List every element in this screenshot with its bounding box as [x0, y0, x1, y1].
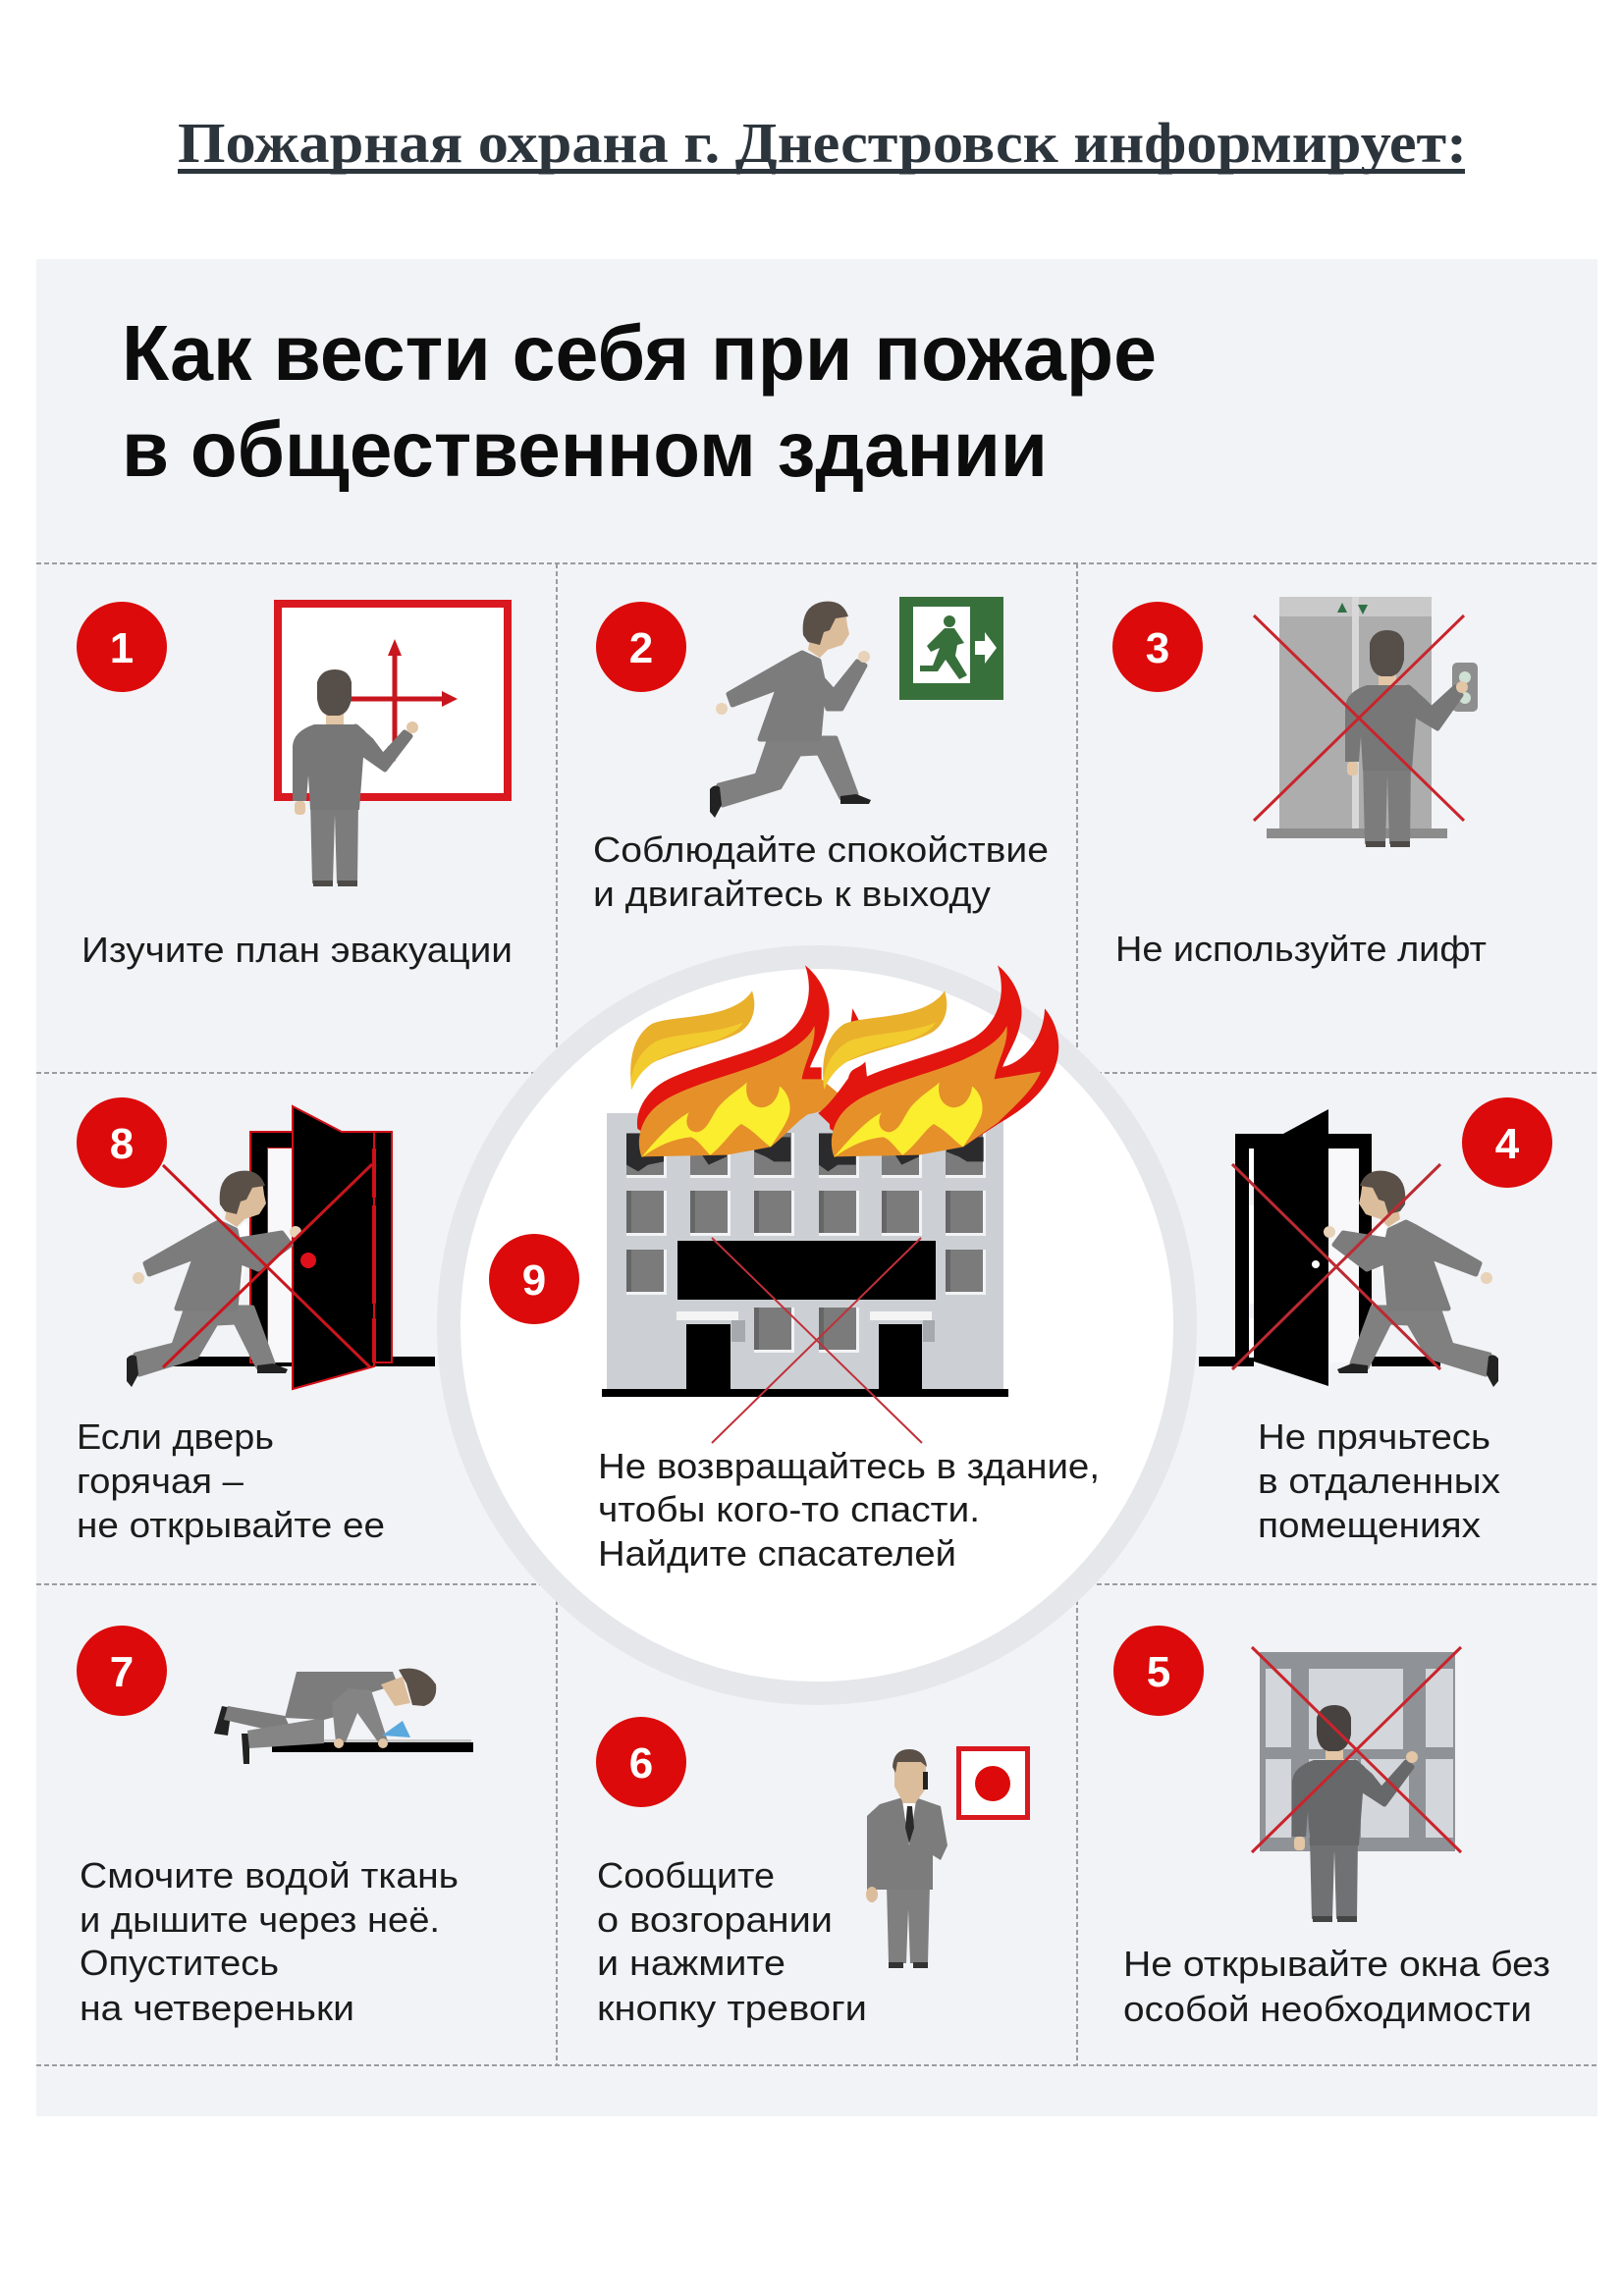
badge 3 — [1112, 602, 1203, 692]
caption 9 — [598, 1446, 1100, 1574]
central circle: step 9, do not return to the building — [449, 957, 1185, 1693]
caption 4: в отдаленных — [1258, 1461, 1500, 1501]
caption 6: о возгорании — [597, 1899, 833, 1940]
badge 5 — [1113, 1626, 1204, 1716]
icon: evacuation plan frame with arrows — [278, 604, 508, 797]
badge 9: 9 — [522, 1256, 546, 1305]
caption 4: помещениях — [1258, 1505, 1481, 1545]
caption 7 — [80, 1855, 459, 2028]
caption 1: Изучите план эвакуации — [81, 930, 513, 970]
icon: crawling man — [214, 1669, 473, 1764]
heading — [122, 309, 1157, 493]
building facade — [602, 1107, 1008, 1397]
caption 8: горячая – — [77, 1461, 244, 1501]
heading: в общественном здании — [122, 405, 1048, 493]
caption 6: и нажмите — [597, 1943, 785, 1983]
flames — [626, 965, 1058, 1171]
step 1: study the evacuation plan — [77, 602, 513, 970]
icon: man at the lift — [1345, 630, 1468, 847]
caption 5: особой необходимости — [1123, 1989, 1532, 2029]
step 5: do not open windows — [1113, 1626, 1550, 2029]
icon: running man, mirrored — [1324, 1171, 1498, 1387]
icon: burning building — [602, 965, 1058, 1443]
page title: Пожарная охрана г. Днестровск информирует: — [178, 111, 1467, 175]
badge 1: 1 — [110, 624, 134, 672]
icon: red cross — [1254, 615, 1464, 821]
infographic panel background — [36, 259, 1597, 2116]
caption 8 — [77, 1416, 385, 1545]
icon: man at the window — [1292, 1705, 1418, 1922]
badge 5: 5 — [1147, 1648, 1170, 1696]
caption 7: Смочите водой ткань — [80, 1855, 459, 1896]
caption 9: чтобы кого-то спасти. — [598, 1489, 980, 1529]
caption 3: Не используйте лифт — [1115, 929, 1487, 969]
step 6: report the fire and press the alarm — [596, 1717, 1027, 2028]
badge 6: 6 — [629, 1739, 653, 1788]
icon: man seen from behind — [293, 669, 418, 886]
step 8: do not open a hot door — [77, 1097, 435, 1545]
white circle with grey ring — [449, 957, 1185, 1693]
caption 2: и двигайтесь к выходу — [593, 874, 991, 914]
caption 7: и дышите через неё. — [80, 1899, 440, 1940]
badge 1 — [77, 602, 167, 692]
icon: red cross — [712, 1238, 922, 1443]
caption 4 — [1258, 1416, 1500, 1545]
icon: red cross — [163, 1164, 372, 1367]
icon: running man — [127, 1171, 301, 1387]
badge 4 — [1462, 1097, 1552, 1188]
badge 3: 3 — [1146, 624, 1169, 672]
badge 7: 7 — [110, 1648, 134, 1696]
badge 7 — [77, 1626, 167, 1716]
caption 6: кнопку тревоги — [597, 1988, 867, 2028]
caption 4: Не прячьтесь — [1258, 1416, 1490, 1457]
caption 7: Опуститесь — [80, 1943, 279, 1983]
caption 7: на четвереньки — [80, 1988, 354, 2028]
icon: running man — [710, 602, 871, 818]
caption 9: Найдите спасателей — [598, 1533, 956, 1574]
badge 2: 2 — [629, 624, 653, 672]
icon: red cross — [1232, 1164, 1440, 1369]
step 4: do not hide in remote rooms — [1199, 1097, 1552, 1545]
caption 8: не открывайте ее — [77, 1505, 385, 1545]
step 3: do not use the lift — [1112, 597, 1487, 969]
badge 4: 4 — [1495, 1120, 1520, 1168]
icon: door with red outline — [170, 1106, 435, 1389]
caption 6: Сообщите — [597, 1855, 775, 1896]
caption 9: Не возвращайтесь в здание, — [598, 1446, 1100, 1486]
icon: red cross — [1252, 1647, 1461, 1852]
badge 8 — [77, 1097, 167, 1188]
icon: alarm button — [958, 1749, 1027, 1818]
step 7: wet a cloth and get on all fours — [77, 1626, 473, 2028]
badge 2 — [596, 602, 686, 692]
badge 6 — [596, 1717, 686, 1807]
icon: man on the phone — [866, 1749, 947, 1968]
icon: black door — [1199, 1109, 1440, 1386]
caption 5: Не открывайте окна без — [1123, 1944, 1550, 1984]
caption 8: Если дверь — [77, 1416, 274, 1457]
heading: Как вести себя при пожаре — [122, 309, 1157, 397]
icon: green exit sign — [899, 597, 1003, 700]
icon: lift doors — [1267, 597, 1478, 838]
caption 5 — [1123, 1944, 1550, 2029]
icon: window — [1260, 1652, 1455, 1851]
step 2: stay calm and move to the exit — [593, 597, 1049, 914]
caption 2: Соблюдайте спокойствие — [593, 829, 1049, 870]
badge 9 — [489, 1234, 579, 1324]
caption 2 — [593, 829, 1049, 914]
badge 8: 8 — [110, 1120, 134, 1168]
caption 6 — [597, 1855, 867, 2028]
